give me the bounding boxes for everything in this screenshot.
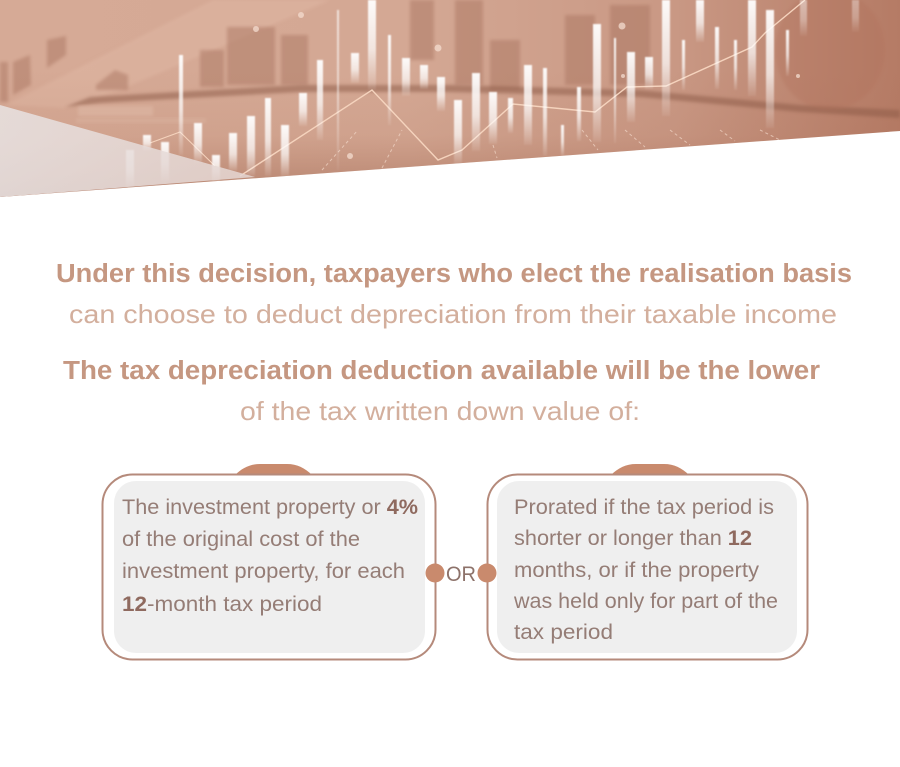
card text: 12-month tax period (122, 593, 322, 616)
left connector dot (426, 564, 444, 582)
panel: right option card (488, 464, 808, 660)
panel: left option card (102, 464, 436, 660)
heading line 2: can choose to deduct depreciation from their taxable income (69, 299, 837, 329)
candlesticks (126, 0, 859, 188)
card tab (611, 464, 689, 475)
diagonal light band (5, 0, 330, 108)
card text: tax period (514, 621, 613, 644)
rule line 1: The tax depreciation deduction available will be the lower (63, 357, 820, 385)
connector: OR between cards (426, 563, 496, 586)
card text: Prorated if the tax period is (514, 496, 774, 519)
card outline (488, 474, 808, 660)
card text (122, 496, 418, 616)
card text: months, or if the property (514, 559, 760, 582)
OR label: OR (446, 563, 476, 586)
heading: deduction rule (63, 357, 820, 426)
heading line 1: Under this decision, taxpayers who elect the realisation basis (56, 260, 852, 288)
road markings (322, 130, 780, 170)
card fill (497, 481, 797, 653)
city buildings (0, 0, 650, 102)
heading: realisation basis statement (56, 260, 852, 329)
card text (513, 496, 778, 644)
card text: investment property, for each (122, 560, 405, 583)
translucent wedge (0, 105, 255, 197)
shading and bridge (0, 137, 752, 197)
glowing dots (253, 12, 800, 159)
card outline (102, 474, 436, 660)
right connector dot (478, 564, 496, 582)
card text: The investment property or 4% (122, 496, 418, 519)
panel: header skyline banner (0, 0, 900, 200)
card tab (235, 464, 312, 475)
card text: of the original cost of the (122, 528, 360, 551)
rule line 2: of the tax written down value of: (240, 396, 640, 426)
trend line (240, 0, 805, 176)
card fill (114, 481, 425, 653)
card text: was held only for part of the (513, 590, 778, 613)
card text: shorter or longer than 12 (514, 527, 752, 550)
